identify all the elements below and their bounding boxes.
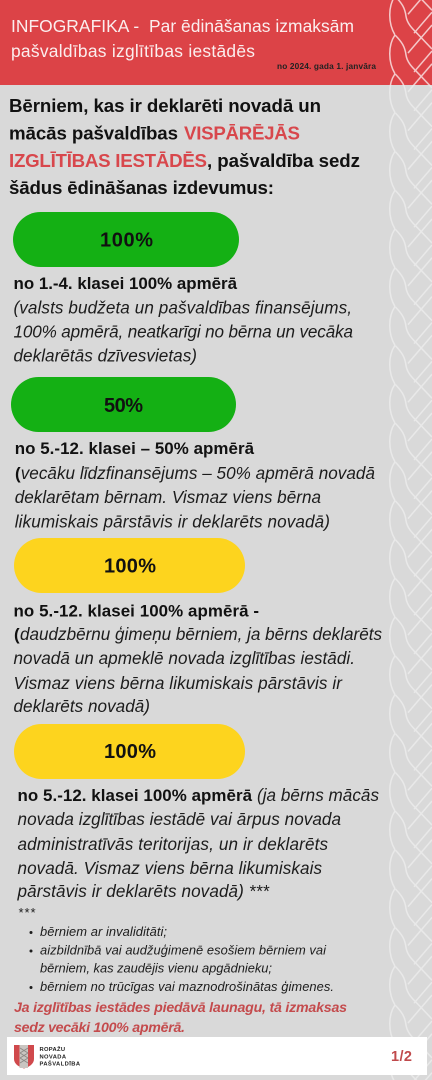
text: grades 5-12 50% (15, 439, 375, 532)
text: grades 1-4: (valsts budžeta un pašvaldības finansējums, (14, 298, 352, 318)
intro heading: IZGLĪTĪBAS IESTĀDĒS (9, 150, 207, 171)
bullet list (30, 924, 334, 994)
pill: 50% green: 50% (104, 395, 143, 417)
text: special categories (16, 786, 379, 901)
bullet list: bērniem ar invaliditāti; (40, 924, 167, 939)
text: special categories: pārstāvis ir deklarēts novadā) *** (16, 882, 270, 901)
intro heading: mācās pašvaldības (9, 122, 178, 144)
title (11, 16, 354, 61)
red note: sedz vecāki 100% apmērā. (14, 1020, 185, 1036)
page number: 1/2 (391, 1049, 412, 1065)
pill: 50% green (11, 377, 236, 432)
pill: 100% yellow second: 100% (104, 741, 156, 763)
red note: Ja izglītības iestādes piedāvā launagu, tā izmaksas (14, 1000, 347, 1016)
title: pašvaldības izglītības iestādēs (11, 41, 255, 61)
intro heading (9, 95, 360, 198)
logo text (40, 1045, 81, 1068)
text: grades 1-4 (14, 274, 353, 366)
pill: 100% green: 100% (100, 230, 153, 252)
intro heading: VISPĀRĒJĀS (184, 122, 300, 144)
header band (0, 0, 432, 85)
title: INFOGRAFIKA - Par ēdināšanas izmaksām (11, 16, 354, 36)
text: grades 5-12 50%: vecāku līdzfinansējums – 50% apmērā novadā (21, 464, 375, 483)
date note: no 2024. gada 1. janvāra (277, 61, 376, 71)
pill: 100% yellow (14, 538, 245, 593)
intro heading: Bērniem, kas ir deklarēti novadā un (9, 95, 321, 116)
intro heading: , pašvaldība sedz (207, 150, 360, 171)
text: large families: deklarēts novadā) (14, 697, 150, 716)
text: special categories: no 5.-12. klasei 100% apmērā (18, 786, 253, 805)
text: large families: novadā un apmeklē novada izglītības iestādi. (14, 649, 355, 668)
text: large families: Vismaz viens bērna likumiskais pārstāvis ir (14, 674, 343, 693)
text: large families: no 5.-12. klasei 100% apmērā - (14, 602, 259, 621)
logo text: NOVADA (40, 1054, 67, 1060)
braid ornament (386, 0, 432, 1080)
text: grades 5-12 50%: ( (15, 464, 21, 483)
text: special categories: administratīvās teritorijas, un ir deklarēts (18, 835, 328, 854)
text: grades 1-4: no 1.-4. klasei 100% apmērā (14, 274, 238, 293)
logo text: PAŠVALDĪBA (40, 1060, 81, 1068)
text: large families: daudzbērnu ģimeņu bērniem, ja bērns deklarēts (20, 625, 382, 644)
text: large families (14, 602, 382, 716)
text: special categories: (ja bērns mācās (257, 786, 379, 805)
asterisks: *** (18, 905, 36, 920)
bullet list: bērniem no trūcīgas vai maznodrošinātas ģimenes. (40, 979, 334, 994)
intro heading: šādus ēdināšanas izdevumus: (9, 177, 274, 198)
text: large families: ( (14, 625, 20, 644)
bullet list: aizbildnībā vai audžuģimenē esošiem bērniem vai (40, 943, 327, 958)
text: grades 5-12 50%: deklarētam bērnam. Vismaz viens bērna (15, 488, 321, 507)
pill: 100% green (13, 212, 239, 267)
text: special categories: novadā. Vismaz viens bērna likumiskais (18, 859, 322, 878)
text: grades 1-4: 100% apmērā, neatkarīgi no bērna un vecāka (14, 323, 353, 342)
pill: 100% yellow second (14, 724, 245, 779)
logo text: ROPAŽU (40, 1045, 65, 1053)
red note (14, 1000, 347, 1036)
text: grades 5-12 50%: no 5.-12. klasei – 50% apmērā (15, 439, 255, 458)
bullet list: bērniem, kas zaudējis vienu apgādnieku; (40, 961, 272, 976)
pill: 100% yellow: 100% (104, 556, 156, 578)
text: special categories: novada izglītības iestādē vai ārpus novada (18, 810, 341, 829)
text: grades 5-12 50%: likumiskais pārstāvis ir deklarēts novadā) (15, 513, 330, 532)
text: grades 1-4: deklarētās dzīvesvietas) (14, 347, 197, 366)
footer bar (7, 1037, 427, 1075)
icon: coat of arms (14, 1045, 34, 1068)
